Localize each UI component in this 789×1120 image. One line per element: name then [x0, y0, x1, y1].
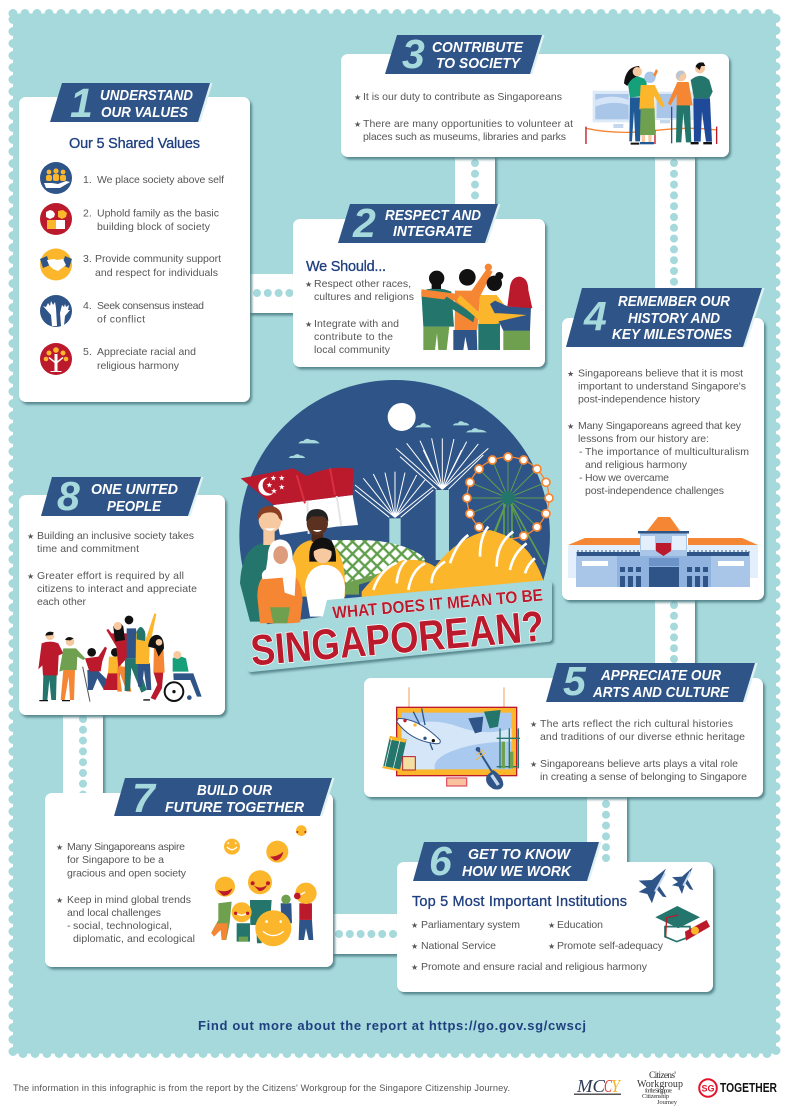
illustration: diverse group: [38, 613, 202, 702]
heading: our 5 shared values: Our 5 Shared Values: [69, 136, 200, 152]
ribbon 1: [50, 80, 212, 126]
ribbon 2: [338, 200, 500, 246]
ribbon 4: REMEMBER OUR: [618, 293, 730, 310]
text block: Respect other races,: [314, 278, 411, 290]
text: value 5: Appreciate racial and: [97, 346, 196, 358]
ribbon 2: 2: [352, 200, 376, 246]
panel 8: one united people: [19, 473, 225, 715]
text: value 1: 1.: [83, 174, 92, 186]
text block: ★: [305, 320, 312, 329]
text block: social, technological,: [73, 920, 172, 932]
icon: handshake: [40, 248, 72, 280]
text: value 1: We place society above self: [97, 174, 224, 186]
text block: local community: [314, 344, 391, 356]
ribbon 7: FUTURE TOGETHER: [165, 799, 304, 816]
logo: MCCY: MC: [576, 1076, 606, 1096]
clouds: [289, 421, 487, 458]
icon: heart tree: [40, 343, 72, 375]
ribbon 6: [413, 838, 602, 884]
text: value 2: [83, 208, 219, 233]
ribbon 4: [566, 288, 764, 347]
text block: -: [67, 920, 71, 932]
text block: [354, 91, 573, 143]
text: value 4: 4.: [83, 300, 92, 312]
text block: Education: [557, 919, 603, 931]
flag: [241, 468, 358, 535]
text block: Many Singaporeans aspire: [67, 841, 185, 853]
text block: The importance of multiculturalism: [585, 446, 749, 458]
ribbon 7: BUILD OUR: [197, 782, 272, 799]
text: value 3: and respect for individuals: [95, 267, 218, 279]
heading: top 5 institutions: Top 5 Most Important Institutions: [412, 894, 627, 910]
logo: MCCY: [574, 1076, 622, 1096]
logo: Citizens' Workgroup: Citizenship: [642, 1093, 669, 1100]
ribbon 6: 6: [429, 838, 453, 884]
supertree large: [396, 438, 488, 560]
ribbon 5: APPRECIATE OUR: [600, 667, 721, 684]
text block: ★: [411, 963, 418, 972]
text block: -: [579, 446, 583, 458]
text: value 3: [83, 253, 221, 279]
connector strips with dots: [63, 150, 695, 954]
text block: and traditions of our diverse ethnic heritage: [540, 731, 745, 743]
text block: Many Singaporeans agreed that key: [578, 420, 742, 432]
ribbon 7: 7: [132, 775, 157, 821]
logo: Citizens' Workgroup: Citizens': [649, 1071, 676, 1081]
text block: Promote and ensure racial and religious harmony: [421, 961, 648, 973]
ribbon 8: [41, 473, 204, 519]
text block: [305, 278, 414, 356]
text: value 3: Provide community support: [95, 253, 221, 265]
ribbon 1: 1: [70, 80, 93, 126]
call to action: find out more: Find out more about the report at https://go.gov.sg/cwscj: [198, 1018, 586, 1033]
logo: Citizens' Workgroup: for the Singapore: [645, 1088, 672, 1094]
text block: [411, 919, 664, 973]
illustration: friends embracing: [421, 264, 532, 350]
text block: ★: [354, 120, 361, 129]
panel 2: respect and integrate: [293, 200, 545, 367]
ribbon 8: ONE UNITED: [91, 481, 178, 498]
man in green: [240, 506, 283, 622]
logo: Citizens' Workgroup: Journey: [657, 1099, 678, 1106]
ribbon 6: HOW WE WORK: [462, 863, 572, 880]
text block: places such as museums, libraries and parks: [363, 131, 566, 143]
esplanade dome: [332, 540, 426, 595]
text block: Keep in mind global trends: [67, 894, 191, 906]
panel 6: get to know how we work: [397, 838, 713, 992]
icon: graduation cap and scroll: [655, 906, 710, 942]
text block: The arts reflect the rich cultural histories: [540, 718, 733, 730]
text block: Integrate with and: [314, 318, 399, 330]
illustration: museum visitors: [586, 62, 717, 145]
text block: ★: [530, 760, 537, 769]
text: value 2: Uphold family as the basic: [97, 208, 219, 220]
text block: ★: [567, 422, 574, 431]
text block: [530, 718, 747, 783]
flag: ★: [278, 482, 285, 491]
supertree small: [355, 472, 433, 545]
text block: ★: [548, 942, 555, 951]
icon: fighter jets: [639, 867, 693, 903]
ribbon 4: 4: [583, 293, 607, 339]
panel 3: contribute to society: [341, 31, 729, 157]
text block: How we overcame: [585, 472, 669, 484]
text block: Singaporeans believe that it is most: [578, 368, 743, 380]
text: value 3: 3.: [83, 253, 92, 265]
flag: ★: [266, 480, 273, 489]
text block: Promote self-adequacy: [557, 940, 664, 952]
text block: Greater effort is required by all: [37, 570, 184, 582]
icon: raised hands: [40, 295, 72, 327]
text block: ★: [354, 93, 361, 102]
text block: and local challenges: [67, 907, 161, 919]
illustration: art frame and instruments: [382, 687, 520, 789]
text block: [56, 841, 195, 945]
text block: ★: [305, 280, 312, 289]
ribbon 8: PEOPLE: [107, 498, 162, 515]
text block: citizens to interact and appreciate: [37, 583, 197, 595]
flag: ★: [278, 474, 285, 483]
moon: [388, 403, 416, 431]
text: value 2: 2.: [83, 208, 92, 220]
ribbon 2: INTEGRATE: [393, 223, 473, 240]
text block: ★: [548, 921, 555, 930]
text block: ★: [27, 532, 34, 541]
flag: ★: [271, 486, 277, 495]
ribbon 8: 8: [57, 473, 80, 519]
flag: ★: [270, 474, 277, 483]
text block: Parliamentary system: [421, 919, 520, 931]
text block: ★: [56, 896, 63, 905]
ferris wheel: [463, 453, 553, 565]
text block: post-independence challenges: [585, 485, 724, 497]
text block: diplomatic, and ecological: [73, 933, 195, 945]
text block: ★: [411, 942, 418, 951]
ribbon 3: [385, 31, 544, 77]
illustration: national museum building: [568, 517, 758, 587]
logo: MCCY: C: [604, 1076, 613, 1096]
ribbon 7: [114, 775, 334, 821]
text block: [27, 530, 197, 608]
ribbon 5: 5: [563, 658, 587, 704]
text block: There are many opportunities to volunteer at: [363, 118, 573, 130]
text block: ★: [411, 921, 418, 930]
text block: contribute to the: [314, 331, 393, 343]
icon: family puzzle: [40, 203, 72, 235]
logo: SG Together: SG: [702, 1084, 714, 1094]
illustration: people with smiley faces: [211, 825, 317, 946]
text block: time and commitment: [37, 543, 139, 555]
skyline circle: [239, 380, 554, 624]
text: value 4: [83, 300, 204, 326]
text: value 4: Seek consensus instead: [97, 300, 204, 312]
panel 7: build our future together: [45, 775, 334, 967]
text block: for Singapore to be a: [67, 854, 164, 866]
text block: It is our duty to contribute as Singaporeans: [363, 91, 562, 103]
text: value 5: religious harmony: [97, 360, 180, 372]
logo: SG Together: [699, 1079, 777, 1097]
panel 1: understand our values: [19, 80, 250, 402]
text block: each other: [37, 596, 86, 608]
text: value 5: [83, 346, 196, 372]
text block: lessons from our history are:: [578, 433, 709, 445]
woman in white: [305, 538, 345, 617]
panel 5: arts and culture: [364, 658, 763, 797]
text block: National Service: [421, 940, 496, 952]
ribbon 6: GET TO KNOW: [468, 846, 572, 863]
text block: ★: [27, 572, 34, 581]
ribbon 5: [546, 658, 758, 704]
text block: important to understand Singapore's: [578, 380, 746, 392]
logo: Citizens' Workgroup: [637, 1071, 683, 1106]
ribbon 4: KEY MILESTONES: [612, 326, 732, 343]
ribbon 3: CONTRIBUTE: [432, 39, 524, 56]
esplanade shell: [362, 526, 544, 597]
ribbon 2: RESPECT AND: [385, 207, 481, 224]
ribbon 1: OUR VALUES: [101, 104, 188, 121]
text block: ★: [567, 370, 574, 378]
logo: SG Together: TOGETHER: [720, 1081, 777, 1095]
banner: what does it mean to be Singaporean: SINGAPOREAN?: [249, 603, 546, 675]
text block: [567, 368, 749, 497]
central hero illustration: [239, 380, 554, 624]
icon: society hand: [40, 162, 72, 194]
ribbon 1: UNDERSTAND: [100, 87, 193, 104]
heading: we should: We Should...: [306, 259, 386, 275]
man in yellow: [293, 509, 345, 597]
text block: in creating a sense of belonging to Singapore: [540, 771, 747, 783]
ribbon 3: 3: [402, 31, 425, 77]
logo: MCCY: Y: [611, 1076, 622, 1096]
footer source note: The information in this infographic is from the report by the Citizens' Workgroup for the Singapore Citizenship Journey.: [13, 1083, 510, 1093]
text block: gracious and open society: [67, 868, 187, 880]
text: value 2: building block of society: [97, 221, 211, 233]
ribbon 3: TO SOCIETY: [436, 55, 522, 72]
banner: what does it mean to be Singaporean: WHAT DOES IT MEAN TO BE: [332, 586, 544, 622]
text block: cultures and religions: [314, 291, 414, 303]
ribbon 5: ARTS AND CULTURE: [592, 684, 730, 701]
text block: post-independence history: [578, 394, 701, 406]
text block: Building an inclusive society takes: [37, 530, 194, 542]
text: value 4: of conflict: [97, 314, 145, 326]
woman in hijab: [257, 539, 303, 623]
ribbon 4: HISTORY AND: [628, 310, 720, 327]
text block: -: [579, 472, 583, 484]
text block: ★: [530, 720, 537, 729]
panel 4: remember our history: [562, 288, 764, 600]
text: value 5: 5.: [83, 346, 92, 358]
text block: ★: [56, 843, 63, 852]
text block: and religious harmony: [585, 459, 688, 471]
logo: Citizens' Workgroup: Workgroup: [637, 1079, 683, 1090]
text block: Singaporeans believe arts plays a vital role: [540, 758, 738, 770]
